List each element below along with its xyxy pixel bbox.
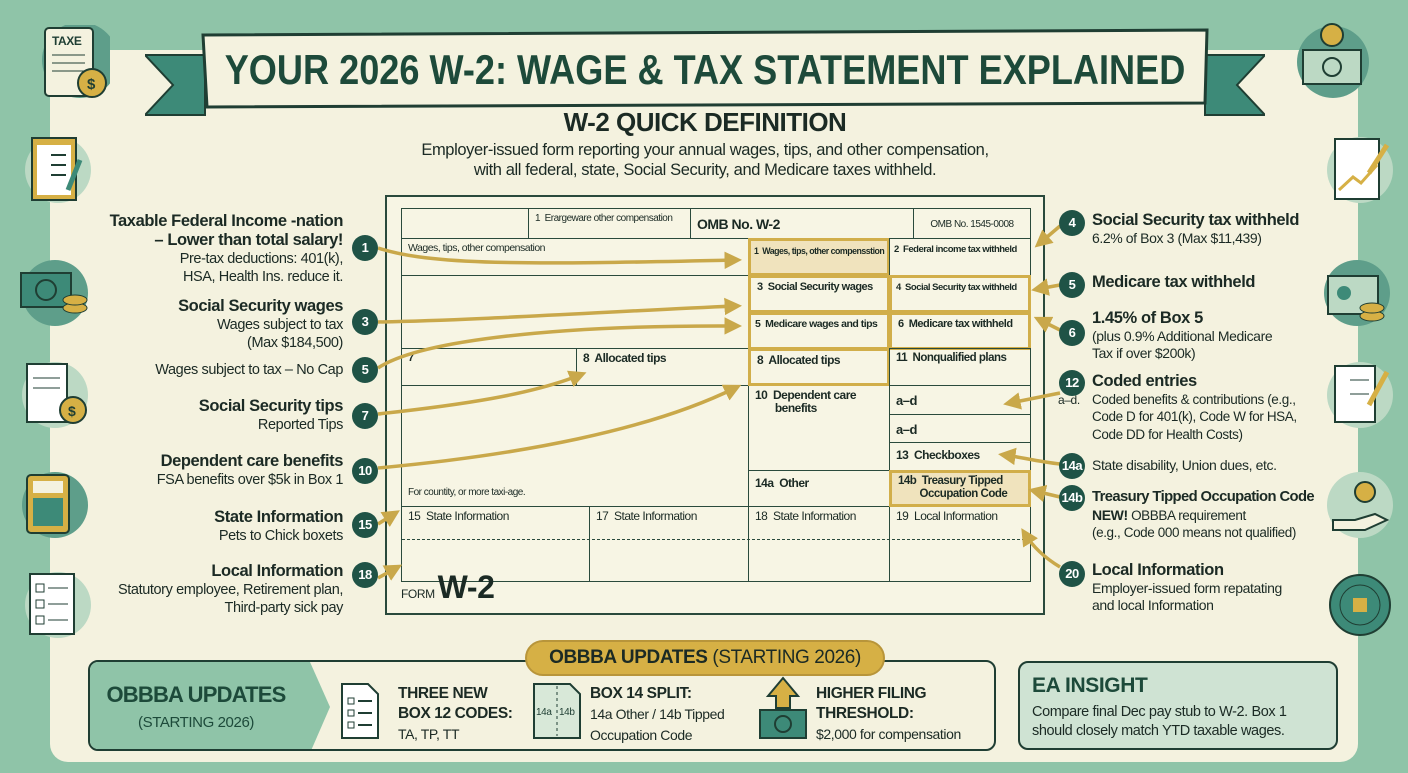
item: filing threshold: $2,000 for compensation [816, 726, 961, 742]
text: 14b [1062, 490, 1082, 505]
text: Third-party sick pay [224, 600, 343, 616]
item: filing threshold: HIGHER FILING [816, 685, 926, 702]
obbba left block: (STARTING 2026) [138, 714, 254, 731]
left labels: Taxable Federal Income -nation [110, 212, 343, 230]
definition text: with all federal, state, Social Security, and Medicare taxes withheld. [474, 161, 936, 179]
text: Local Information [1092, 561, 1224, 579]
form label: FORM W-2 [401, 569, 494, 605]
item: box 14 split: BOX 14 SPLIT: [590, 685, 692, 702]
text: and local Information [1092, 597, 1214, 613]
W-2 form [385, 195, 1045, 615]
definition text [421, 141, 989, 179]
text: Pets to Chick boxets [219, 528, 343, 544]
item: three codes: THREE NEW [398, 685, 487, 702]
W-2 form: a–d [896, 393, 917, 408]
text: 5 [362, 362, 368, 377]
title banner [145, 28, 1265, 116]
definition text: Employer-issued form reporting your annual wages, tips, and other compensation, [421, 141, 989, 159]
W-2 form: 4 Social Security tax withheld [896, 282, 1017, 293]
left icons: $ [87, 76, 96, 93]
text: Employer-issued form repatating [1092, 580, 1282, 596]
right labels: 4 [1069, 215, 1075, 230]
item: box 14 split: 14b [559, 707, 575, 718]
text: Social Security tax withheld [1092, 211, 1299, 229]
text: Social Security wages [178, 297, 343, 315]
W-2 form: 5 Medicare wages and tips [755, 318, 877, 330]
left icons [42, 25, 110, 98]
text: Wages subject to tax – No Cap [155, 362, 343, 378]
text: 7 [362, 408, 368, 423]
item: box 14 split: Occupation Code [590, 727, 692, 743]
W-2 form: 14b Treasury Tipped [898, 475, 1003, 487]
text: Statutory employee, Retirement plan, [118, 582, 343, 598]
text: 6 [1069, 325, 1075, 340]
obbba left block [90, 662, 330, 753]
definition heading: W-2 QUICK DEFINITION [564, 107, 846, 137]
left labels: Pre-tax deductions: 401(k), [180, 251, 343, 267]
W-2 form: Wages, tips, other compensation [408, 242, 545, 254]
W-2 form: Occupation Code [920, 488, 1007, 500]
left labels [110, 212, 343, 285]
left labels: – Lower than total salary! [154, 231, 343, 249]
text: Reported Tips [258, 417, 343, 433]
text: 20 [1065, 566, 1079, 581]
W-2 form: 6 Medicare tax withheld [898, 318, 1013, 330]
W-2 form: 8 Allocated tips [757, 353, 840, 367]
W-2 form: 14a Other [755, 476, 809, 490]
right labels [1059, 210, 1085, 236]
text: Wages subject to tax [217, 317, 343, 333]
W-2 form: 11 Nonqualified plans [896, 352, 1006, 364]
obbba pill heading: OBBBA UPDATES (STARTING 2026) [549, 647, 861, 668]
text: FSA benefits over $5k in Box 1 [157, 472, 343, 488]
text: Treasury Tipped Occupation Code [1092, 489, 1314, 505]
panel: EA insight [1018, 661, 1338, 750]
text: Local Information [211, 562, 343, 580]
ea heading: EA INSIGHT [1032, 674, 1147, 697]
text: 3 [362, 314, 368, 329]
W-2 form: OMB No. W-2 [697, 216, 780, 232]
text: State Information [214, 508, 343, 526]
W-2 form: 10 Dependent care [755, 388, 856, 402]
W-2 form: benefits [775, 401, 817, 415]
text: 10 [358, 463, 372, 478]
item: box 14 split: 14a [536, 707, 552, 718]
W-2 form: For countity, or more taxi-age. [408, 487, 525, 498]
W-2 form: 1 Erargeware other compensation [535, 213, 672, 224]
W-2 form: 13 Checkboxes [896, 448, 980, 462]
highlighted boxes: 1 Wages, tips, other compensstion [754, 246, 884, 256]
ea text: Compare final Dec pay stub to W-2. Box 1 should closely match YTD taxable wages. [1032, 704, 1287, 739]
item: filing threshold: THRESHOLD: [816, 705, 914, 722]
text: Dependent care benefits [161, 452, 343, 470]
W-2 form: OMB No. 1545-0008 [930, 219, 1014, 230]
text: 1.45% of Box 5 [1092, 309, 1203, 327]
left icons: TAXE [52, 34, 82, 48]
W-2 form: 17 State Information [596, 509, 697, 523]
W-2 form: 8 Allocated tips [583, 351, 666, 365]
text: Medicare tax withheld [1092, 273, 1255, 291]
text: 18 [358, 567, 372, 582]
text: (e.g., Code 000 means not qualified) [1092, 525, 1296, 540]
W-2 form: 2 Federal income tax withheld [894, 244, 1017, 255]
text: 12 [1065, 375, 1079, 390]
text: 6.2% of Box 3 (Max $11,439) [1092, 230, 1261, 246]
text: Code D for 401(k), Code W for HSA, [1092, 409, 1297, 424]
W-2 form: 18 State Information [755, 509, 856, 523]
text: a–d. [1058, 393, 1080, 407]
text: Tax if over $200k) [1092, 345, 1195, 361]
panel: OBBBA updates [88, 660, 996, 751]
W-2 form: 3 Social Security wages [757, 281, 873, 293]
obbba pill heading [525, 640, 885, 676]
text: State disability, Union dues, etc. [1092, 457, 1277, 473]
W-2 form: 7 [408, 352, 414, 364]
W-2 form: 19 Local Information [896, 509, 998, 523]
text: 14a [1062, 458, 1082, 473]
text: Coded entries [1092, 372, 1197, 390]
W-2 form: a–d [896, 422, 917, 437]
text: 5 [1069, 277, 1075, 292]
item: three codes: BOX 12 CODES: [398, 705, 513, 722]
text: Coded benefits & contributions (e.g., [1092, 392, 1296, 406]
obbba left block: OBBBA UPDATES [106, 682, 286, 707]
item: box 14 split [533, 683, 724, 743]
text: 1 [362, 240, 368, 255]
text: NEW! OBBBA requirement [1092, 506, 1246, 522]
item: filing threshold [759, 676, 961, 742]
text: $ [68, 403, 76, 419]
text: 15 [358, 517, 372, 532]
text: Code DD for Health Costs) [1092, 426, 1243, 442]
text: (plus 0.9% Additional Medicare [1092, 328, 1272, 344]
highlighted boxes [748, 238, 890, 276]
title: YOUR 2026 W-2: WAGE & TAX STATEMENT EXPLAINED [225, 46, 1185, 93]
W-2 form: 15 State Information [408, 509, 509, 523]
item: three codes [341, 683, 513, 742]
right icons [1297, 23, 1369, 98]
item: three codes: TA, TP, TT [398, 726, 459, 742]
text: (Max $184,500) [247, 335, 343, 351]
left labels: HSA, Health Ins. reduce it. [183, 269, 343, 285]
item: box 14 split: 14a Other / 14b Tipped [590, 706, 724, 722]
text: Social Security tips [199, 397, 343, 415]
